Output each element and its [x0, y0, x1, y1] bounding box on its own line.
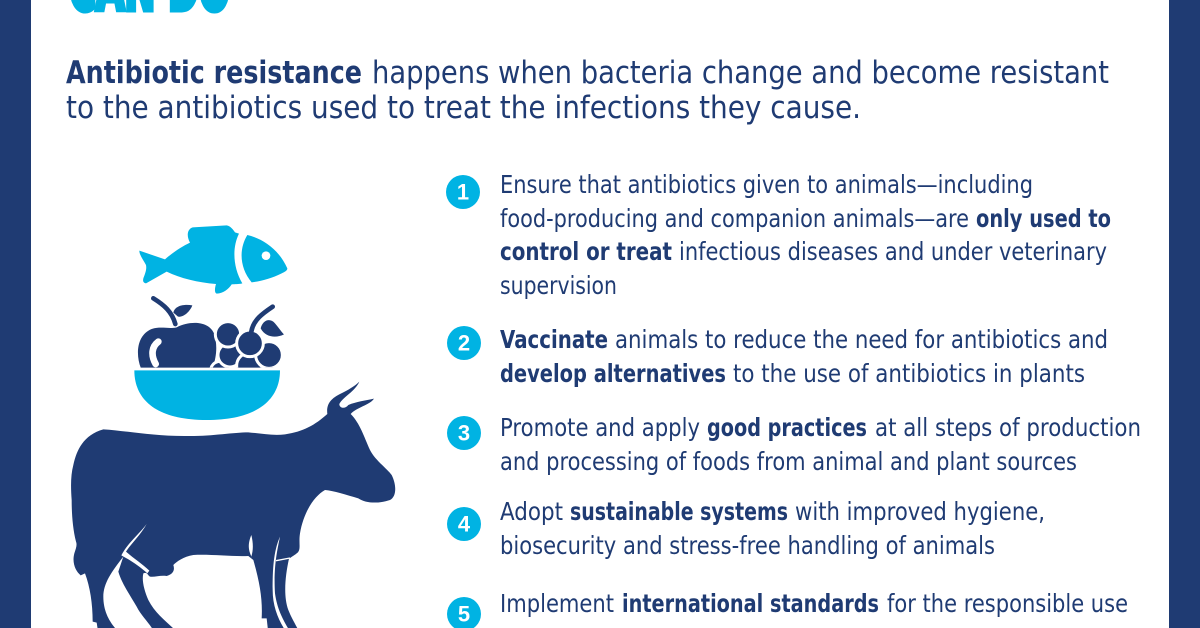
- step 3: [447, 413, 1141, 476]
- badge 3: 3: [458, 420, 470, 446]
- step 1: food-producing and companion animals—are: [500, 204, 969, 233]
- right border: [1169, 0, 1200, 628]
- step 5: Implement: [500, 589, 614, 618]
- step 3: Promote and apply: [500, 413, 700, 442]
- intro text: happens when bacteria change and become resistant: [372, 55, 1109, 91]
- intro text: Antibiotic resistance: [66, 55, 362, 91]
- step 1: infectious diseases and under veterinary: [679, 237, 1107, 266]
- step 3: good practices: [707, 413, 867, 442]
- step 4: Adopt: [500, 497, 563, 526]
- badge 4: 4: [458, 512, 471, 536]
- intro text: to the antibiotics used to treat the infections they cause.: [66, 90, 861, 126]
- icon: fruit bowl: [134, 298, 284, 420]
- left border: [0, 0, 31, 628]
- intro text: [66, 55, 1109, 126]
- icon: cow: [71, 382, 395, 628]
- badge 2: [447, 326, 481, 360]
- step 1: Ensure that antibiotics given to animals—including: [500, 170, 1033, 199]
- badge 5: [447, 597, 481, 628]
- step 1: only used to: [976, 204, 1111, 233]
- step 5: for the responsible use: [887, 589, 1128, 618]
- step 3: at all steps of production: [875, 413, 1141, 442]
- step 4: sustainable systems: [570, 497, 788, 526]
- step 2: [447, 325, 1108, 388]
- step 3: and processing of foods from animal and plant sources: [500, 447, 1077, 476]
- step 5: [447, 589, 1128, 628]
- badge 5: 5: [458, 602, 470, 626]
- badge 1: [446, 175, 480, 209]
- step 2: develop alternatives: [500, 359, 726, 388]
- badge 4: [447, 507, 481, 541]
- step 1: [446, 170, 1111, 300]
- step 5: international standards: [622, 589, 879, 618]
- icon: fish: [139, 225, 287, 294]
- step 2: animals to reduce the need for antibiotics and: [615, 325, 1108, 354]
- badge 2: 2: [458, 330, 470, 356]
- step 1: control or treat: [500, 237, 672, 266]
- badge 3: [447, 416, 481, 450]
- step 4: biosecurity and stress-free handling of animals: [500, 531, 995, 560]
- step 4: [447, 497, 1045, 560]
- step 4: with improved hygiene,: [795, 497, 1045, 526]
- step 2: Vaccinate: [500, 325, 608, 354]
- step 2: to the use of antibiotics in plants: [733, 359, 1085, 388]
- step 1: supervision: [500, 271, 617, 300]
- badge 1: 1: [457, 180, 469, 204]
